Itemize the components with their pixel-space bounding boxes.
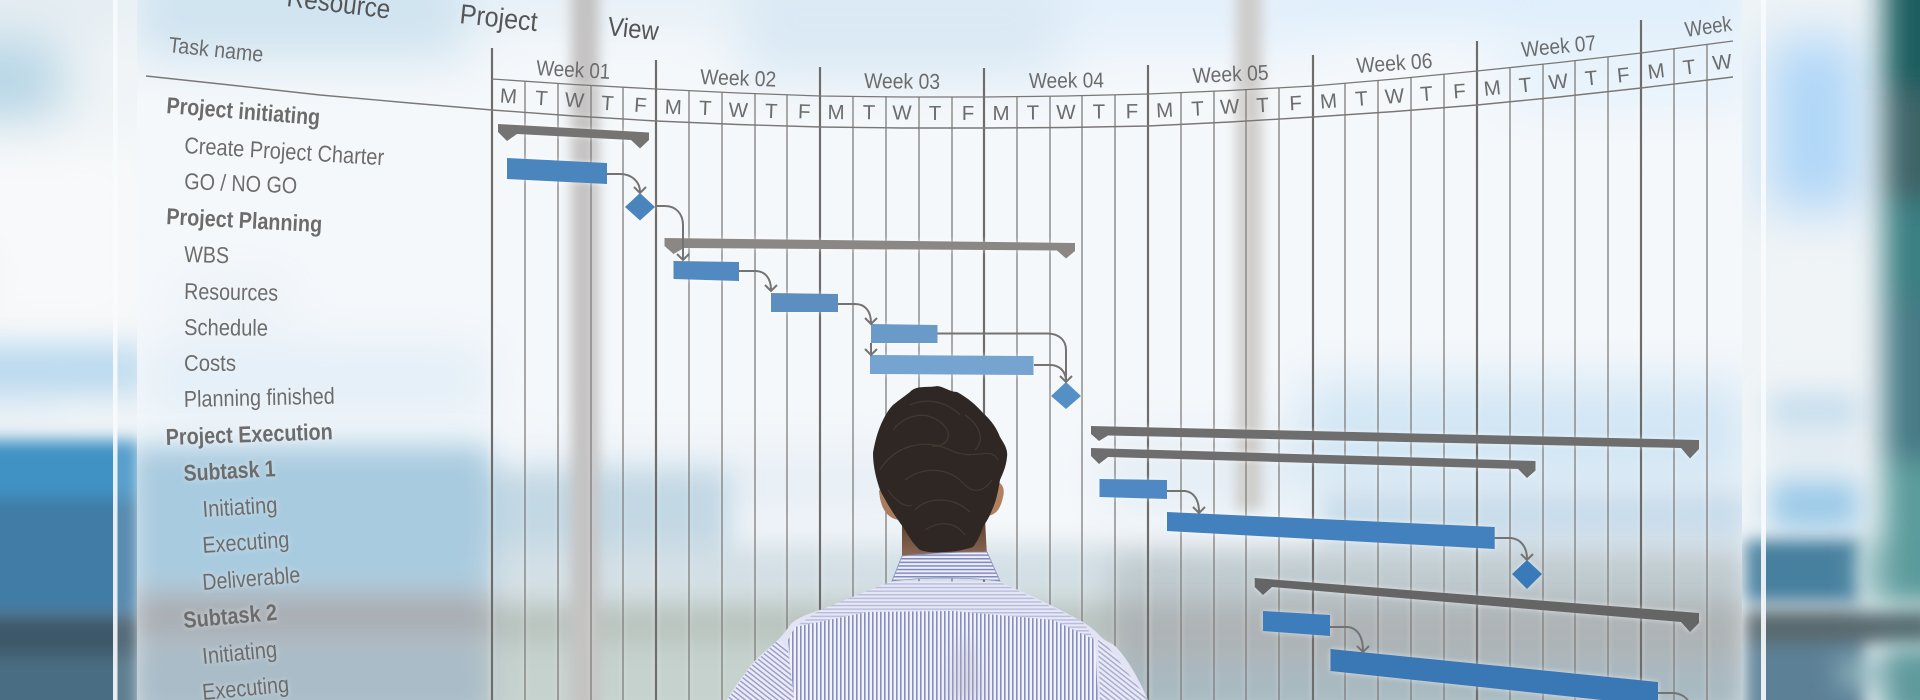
days: week 03: W: [892, 102, 912, 125]
days: week 06: T: [1354, 87, 1369, 111]
arrow: schedule to costs: [865, 343, 877, 355]
shirt: [727, 581, 1148, 700]
task: Executing: Executing: [202, 526, 290, 558]
task: Planning finished: Planning finished: [184, 383, 335, 412]
days: week 06: [1319, 80, 1467, 114]
gantt bars and milestones: [498, 124, 1699, 700]
days: week 05: M: [1156, 99, 1174, 122]
days: week 07: T: [1584, 66, 1599, 91]
header bottom curve: [146, 76, 1733, 128]
days: week 06: M: [1319, 89, 1338, 114]
days: week 04: T: [1027, 101, 1040, 125]
task bar: Subtask 1 initiating: [1100, 479, 1167, 499]
task bar: Create Project Charter: [507, 158, 607, 184]
days: week 08: T: [1682, 55, 1697, 80]
task: Subtask 1: Subtask 1: [183, 455, 276, 486]
days: week 01: [499, 84, 647, 117]
milestone: GO / NO GO: [625, 193, 655, 220]
task bar: Costs: [870, 355, 1034, 375]
neck: [902, 520, 987, 560]
days: week 04: T: [1093, 101, 1106, 124]
days: week 06: F: [1452, 80, 1467, 103]
task: Resources: Resources: [184, 278, 278, 306]
days: week 07: F: [1616, 63, 1631, 88]
arrow: costs to planning finished: [1034, 365, 1066, 381]
task list: [165, 92, 385, 700]
task bar: Subtask 2 initiating: [1263, 611, 1330, 636]
heading: Week 07: Week 07: [1520, 31, 1597, 62]
days: week 04: F: [1126, 100, 1138, 123]
summary bar: Project initiating: [498, 124, 649, 148]
task bar: Subtask 1 executing: [1167, 512, 1495, 549]
days: week 02: M: [664, 96, 682, 119]
arrow: subtask 1 executing to deliverable: [1495, 538, 1533, 560]
days: week 03: T: [863, 101, 876, 124]
heading: Week (partial): Week: [1683, 12, 1733, 42]
task bar: Resources: [771, 293, 838, 312]
task: Project Execution: Project Execution: [165, 418, 333, 450]
task: Initiating: Initiating: [201, 636, 278, 669]
dependency arrows: [607, 174, 1690, 700]
task: Project Planning: Project Planning: [166, 203, 323, 237]
arrow: subtask 1 initiating to executing: [1167, 491, 1205, 513]
heading: Week 02: Week 02: [700, 65, 777, 92]
task bar: Schedule: [871, 324, 938, 343]
arrow: resources to schedule: [838, 304, 877, 324]
shirt fold shadow: [945, 640, 985, 700]
arrow: schedule to planning finished: [938, 334, 1072, 382]
menu: View: View: [606, 11, 661, 46]
days: week 02: T: [699, 97, 712, 120]
days: week 03: M: [827, 101, 845, 124]
days: week 07: M: [1483, 76, 1502, 101]
day grid lines: [525, 44, 1707, 700]
days: week 08: W: [1711, 50, 1734, 75]
days: week 01: F: [633, 94, 647, 117]
ear: left: [879, 490, 905, 520]
task: Project initiating: Project initiating: [166, 92, 321, 130]
days: week 01: M: [499, 84, 518, 109]
arrow: WBS to resources: [739, 271, 777, 291]
task bar: Subtask 2 executing: [1330, 649, 1658, 700]
ear: right: [987, 482, 1004, 516]
arrow: subtask 2 initiating to executing: [1330, 627, 1369, 652]
milestone: Planning finished: [1051, 382, 1081, 409]
days: week 05: [1156, 92, 1303, 122]
shirt yoke stripes: [795, 581, 1095, 640]
collar: [892, 552, 1000, 581]
days: week 02: W: [728, 99, 749, 122]
summary bar: Subtask 2: [1255, 578, 1699, 632]
days: week 02: [664, 96, 811, 124]
days: week 05: T: [1256, 94, 1270, 117]
days: week 03: T: [929, 102, 942, 125]
heading: Week 01: Week 01: [536, 56, 611, 84]
days: week 02: T: [765, 100, 778, 123]
hair highlights: [880, 401, 998, 535]
task: Subtask 2: Subtask 2: [182, 599, 278, 633]
shirt back panel: [788, 611, 1098, 700]
arrow: charter to go/no-go: [607, 174, 646, 193]
arrow: go/no-go to WBS: [655, 206, 689, 260]
days: week 04: M: [992, 102, 1010, 125]
days: week 03: F: [962, 102, 974, 125]
days: week 05: T: [1191, 97, 1205, 121]
hair: [873, 386, 1007, 552]
days: week 04: W: [1056, 101, 1076, 124]
days: week 03: [827, 101, 974, 125]
summary bar: Subtask 1: [1091, 448, 1536, 478]
task: WBS: WBS: [184, 241, 230, 268]
heading: Week 04: Week 04: [1029, 68, 1104, 93]
arrow: subtask 2 executing onward: [1658, 693, 1690, 700]
task: Deliverable: Deliverable: [201, 561, 301, 595]
right sleeve stripes: [1098, 640, 1148, 700]
week grid lines: [492, 20, 1641, 700]
menu labels: [167, 0, 661, 67]
days: week 01: T: [600, 92, 615, 115]
days: week 06: T: [1419, 82, 1434, 106]
days: week 05: F: [1289, 92, 1303, 115]
week headings: [536, 12, 1733, 94]
task: Schedule: Schedule: [184, 314, 268, 341]
milestone: Subtask 1 deliverable: [1512, 560, 1542, 589]
days: week 08: M: [1646, 59, 1666, 84]
days: week 06: W: [1384, 84, 1406, 109]
days: week 05: W: [1219, 95, 1241, 119]
days: week 07: W: [1547, 70, 1570, 94]
heading: Week 03: Week 03: [864, 69, 940, 94]
heading: Week 05: Week 05: [1192, 61, 1269, 88]
task: Costs: Costs: [184, 350, 236, 376]
summary bar: Project Planning: [664, 238, 1075, 258]
days: week 07: T: [1518, 73, 1533, 98]
days: week 08: [1646, 50, 1734, 84]
summary bar: Project Execution: [1091, 426, 1699, 458]
task: Initiating: Initiating: [202, 491, 278, 522]
column heading: Task name: Task name: [167, 32, 265, 67]
task: GO / NO GO: GO / NO GO: [184, 168, 298, 199]
days: week 01: W: [564, 88, 585, 113]
days: week 02: F: [798, 100, 811, 124]
header top curve: [492, 41, 1733, 97]
task bar: WBS: [674, 261, 739, 281]
man seen from behind: [727, 386, 1148, 700]
left sleeve stripes: [727, 640, 794, 700]
days: week 01: T: [534, 87, 549, 110]
day headings: [499, 50, 1734, 125]
days: week 04: [992, 100, 1138, 125]
heading: Week 06: Week 06: [1356, 49, 1433, 78]
task: Create Project Charter: Create Project Charter: [184, 132, 385, 170]
days: week 07: [1483, 63, 1631, 101]
